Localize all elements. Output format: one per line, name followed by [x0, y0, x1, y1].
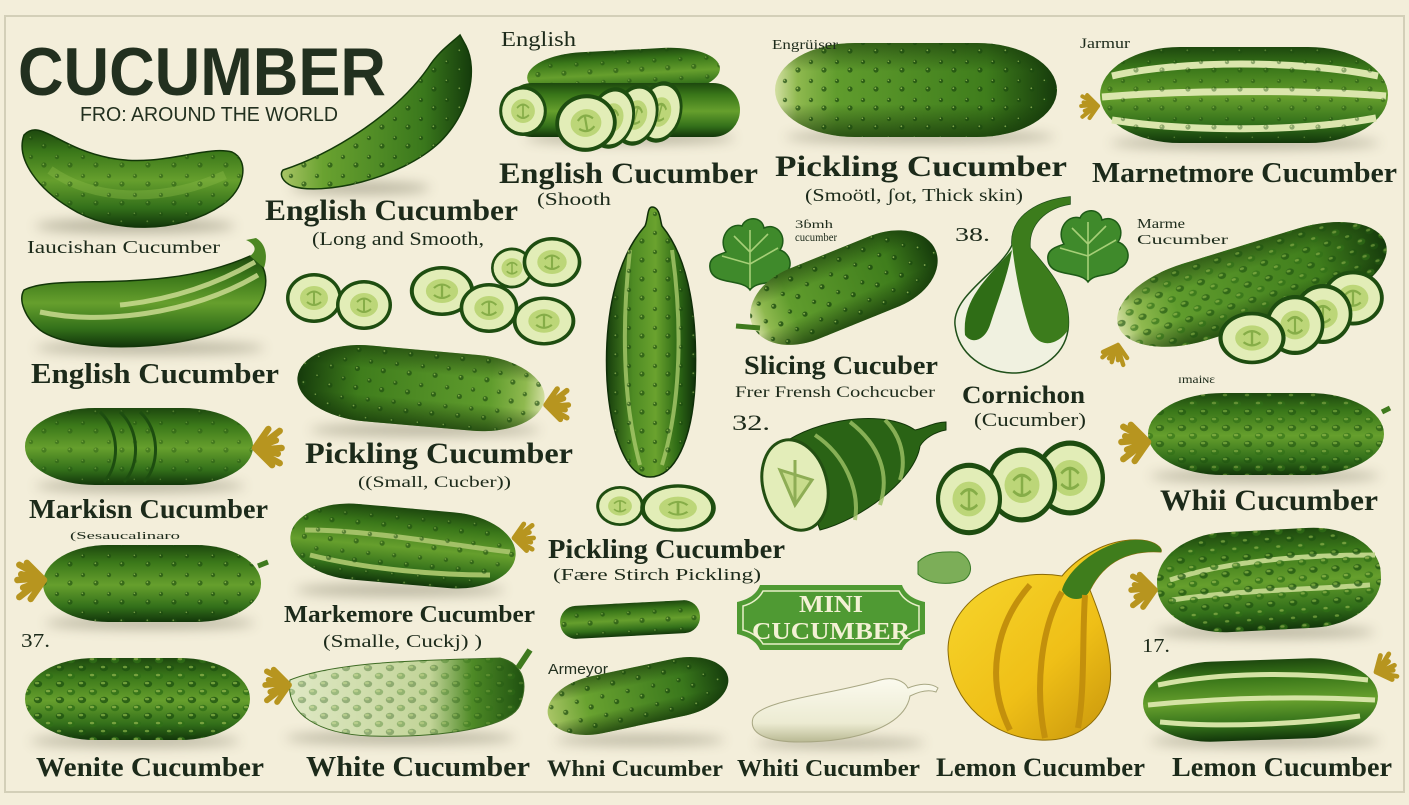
- gourd: yellow lemon: [948, 540, 1161, 740]
- label: small slicing note: 3ɓmh: [795, 217, 833, 231]
- cucumbers: English sliced stack: [499, 45, 740, 157]
- label: Lemon Cucumber one: Lemon Cucumber: [936, 753, 1145, 782]
- note: long and smooth: (Long and Smooth,: [312, 229, 484, 250]
- cucumber: mini: [559, 599, 701, 640]
- label: Marketmore Cucumber top: Marnetmore Cucumber: [1092, 158, 1397, 189]
- label: Engruiser: Engrüiser: [772, 38, 838, 53]
- label: small left cucumber: Iaucishan Cucumber: [27, 237, 220, 257]
- cucumber: marketmore striped top: [1081, 47, 1388, 143]
- badge: mini cucumber: [737, 585, 925, 650]
- icon: leaf right: [1048, 211, 1128, 282]
- label: Whiti Cucumber: Whiti Cucumber: [737, 756, 920, 782]
- cucumber: curved top: [281, 35, 471, 189]
- label: English Cucumber upper left: English Cucumber: [265, 194, 518, 227]
- label: Marme Cucumber: Marme: [1137, 217, 1185, 232]
- cucumber: striped curved left: [22, 238, 266, 347]
- number: 32: 32.: [732, 410, 770, 435]
- number: 37: 37.: [21, 630, 50, 652]
- cucumber: slicing: [736, 215, 950, 360]
- icon: leaf left: [710, 219, 790, 290]
- label: small slicing note: [795, 217, 837, 244]
- number: 38: 38.: [955, 224, 990, 246]
- badge: mini cucumber: MINI: [799, 592, 863, 618]
- cucumber slices: centre right: [936, 440, 1105, 535]
- cucumber: striped right lower: [1142, 652, 1399, 744]
- label: Marme Cucumber: [1137, 217, 1229, 248]
- label: Slicing Cucumber: Slicing Cucuber: [744, 351, 938, 380]
- cucumber: marketmore with slices: [1101, 205, 1397, 367]
- note: Shooth: (Shooth: [537, 189, 611, 210]
- cucumber: pickling middle: [294, 339, 568, 437]
- label: Jarmur: Jarmur: [1080, 36, 1130, 52]
- cucumber: bumpy lower left: [25, 658, 250, 740]
- label: Markemore Cucumber lower: Markemore Cucumber: [284, 602, 535, 628]
- badge: mini cucumber: CUCUMBER: [752, 619, 911, 645]
- subtitle: FRO: AROUND THE WORLD: [80, 104, 338, 126]
- label: Pickling Cucumber middle: Pickling Cucumber: [305, 437, 573, 470]
- note: smalle cuckj: (Smalle, Cuckj) ): [323, 631, 482, 652]
- label: Armeyor: Armeyor: [548, 661, 608, 678]
- label: small maine note: ɪmaiɴɛ: [1178, 372, 1215, 386]
- cucumber: tall vertical: [607, 207, 696, 477]
- gourd: cornichon: [955, 197, 1070, 373]
- note: smooth thick skin: (Smoötl, ʃot, Thick skin): [805, 185, 1023, 206]
- cucumber: bumpy right: [1121, 393, 1390, 475]
- label: Lemon Cucumber two: Lemon Cucumber: [1172, 752, 1392, 782]
- cucumber: bumpy right lower: [1131, 524, 1383, 636]
- cucumber: striped middle: [287, 498, 534, 594]
- title: CUCUMBER: [18, 34, 386, 110]
- cucumber: cut end: [752, 419, 946, 538]
- cucumber: white: [752, 679, 938, 742]
- label: Whni Cucumber: Whni Cucumber: [547, 756, 723, 781]
- label: Whii Cucumber: Whii Cucumber: [1160, 484, 1378, 517]
- cucumber: pickling top: [775, 43, 1057, 137]
- label: English small: English: [501, 27, 577, 51]
- label: small slicing note: cucumber: [795, 230, 837, 244]
- cucumber slices: left pair: [286, 273, 392, 330]
- number: 17: 17.: [1142, 635, 1170, 657]
- label: Pickling Cucumber centre: Pickling Cucumber: [548, 534, 785, 564]
- label: Cornichon: Cornichon: [962, 382, 1085, 409]
- label: Marme Cucumber: Cucumber: [1137, 233, 1229, 248]
- cucumber: ribbed left: [25, 408, 282, 485]
- note: small cucber: ((Small, Cucber)): [358, 474, 511, 491]
- label: English Cucumber left: English Cucumber: [31, 358, 279, 390]
- label: White Cucumber: White Cucumber: [306, 751, 530, 783]
- label: Markisn Cucumber: Markisn Cucumber: [29, 494, 268, 524]
- icon: small leaf cluster: [918, 552, 971, 583]
- cucumber: lower centre: [542, 649, 734, 743]
- cucumber: curved left: [22, 130, 243, 227]
- note: French cucumber: Frer Frensh Cochcucber: [735, 384, 936, 401]
- cucumber slices: centre small: [596, 484, 716, 532]
- label: Pickling Cucumber top: Pickling Cucumber: [775, 150, 1067, 183]
- note: cucumber in parentheses: (Cucumber): [974, 410, 1086, 431]
- label: Wenite Cucumber: Wenite Cucumber: [36, 752, 264, 782]
- cucumber slices: right group: [410, 237, 581, 346]
- cucumber: white-green: [265, 650, 530, 736]
- label: English Cucumber top: English Cucumber: [499, 157, 758, 190]
- note: small left note: (Sesaucalinaro: [70, 530, 181, 542]
- note: French pickling: (Fære Stirch Pickling): [553, 565, 761, 584]
- cucumber: spotted left: [17, 545, 268, 622]
